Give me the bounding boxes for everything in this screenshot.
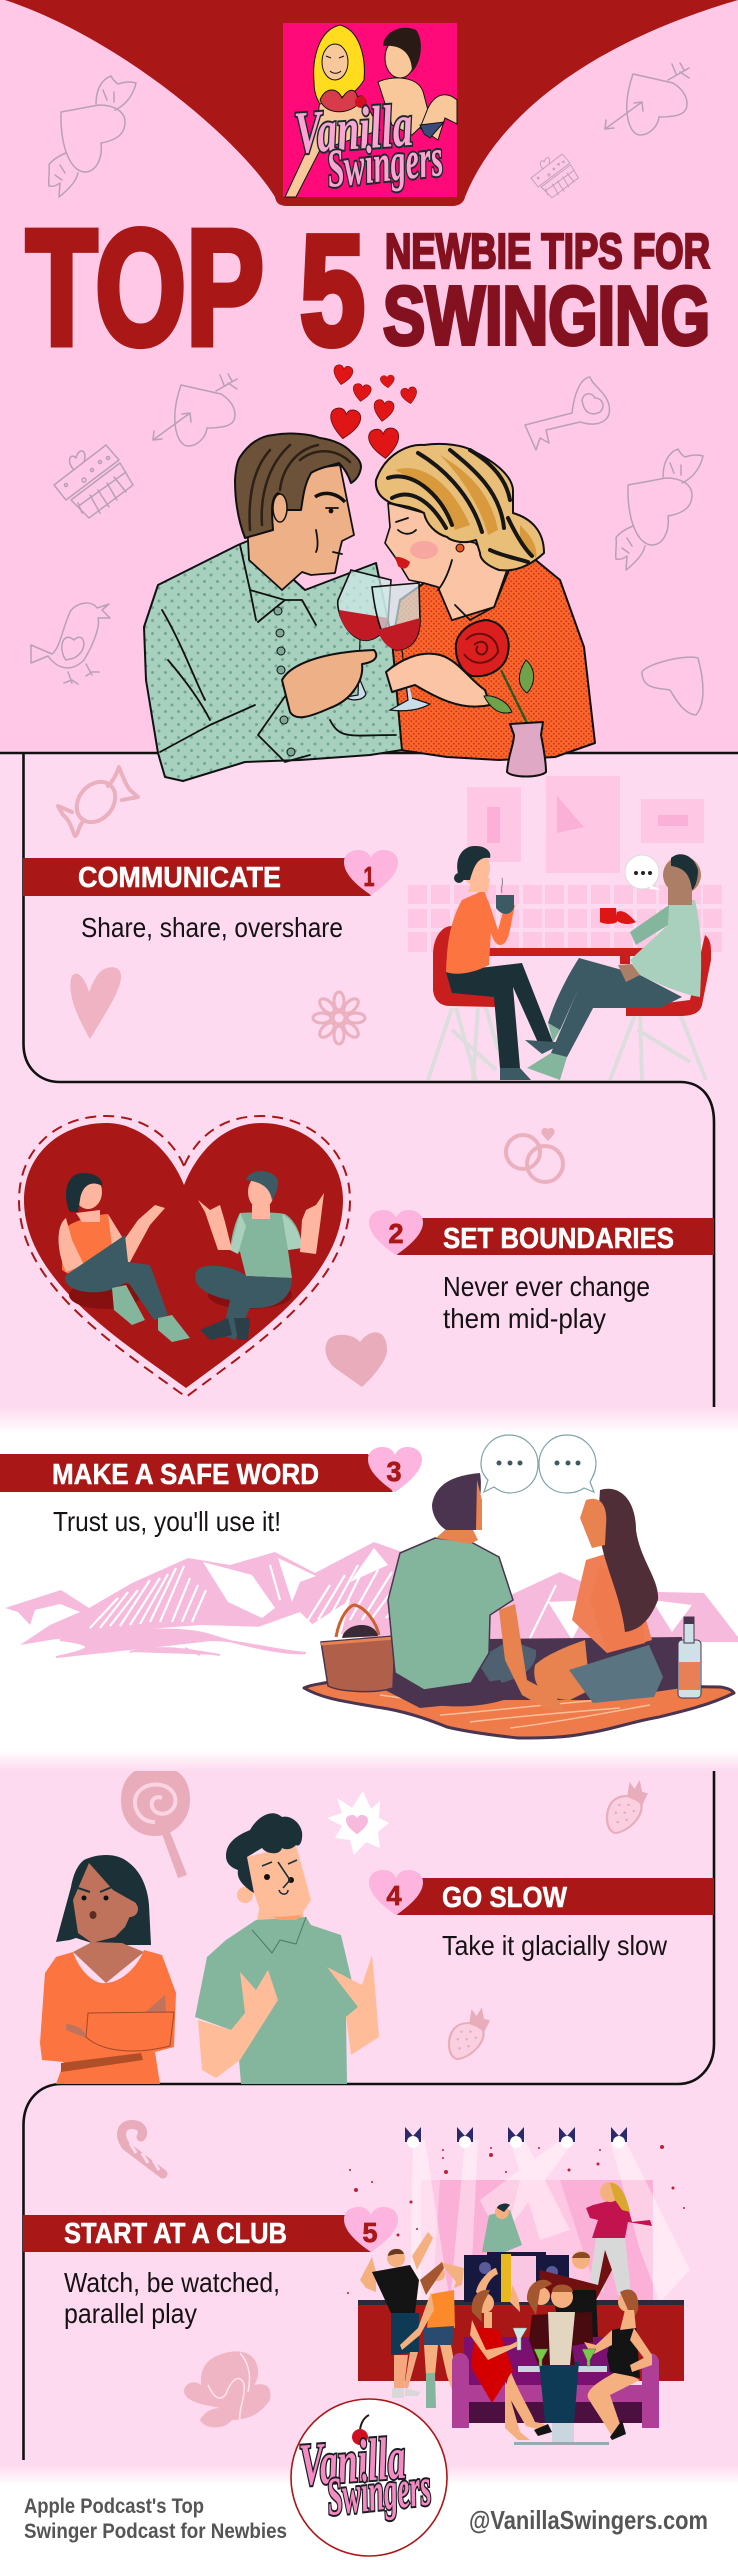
background rose [184, 2351, 270, 2428]
logo wordmark [292, 92, 446, 199]
woman dress [391, 557, 595, 760]
center man [529, 2284, 593, 2436]
background heart [70, 967, 121, 1039]
logo woman figure [285, 25, 380, 197]
footer [24, 2399, 708, 2556]
starburst with heart [327, 1791, 389, 1855]
number heart 1 [344, 850, 398, 895]
footer wordmark: Swingers [324, 2456, 434, 2527]
footer tagline: Apple Podcast's Top [24, 2495, 204, 2518]
top logo [283, 23, 457, 199]
number heart 2: 2 [388, 1218, 404, 1249]
man from behind [388, 1473, 565, 1712]
doodle: arrow heart left [153, 374, 237, 446]
man hair strands [250, 445, 350, 530]
background doodle: flower [313, 992, 365, 1044]
heading 5: START AT A CLUB [64, 2218, 287, 2250]
number heart 4 [369, 1870, 423, 1915]
doodle: outline heart [642, 657, 703, 715]
man hair [235, 434, 361, 538]
woman crossed arms [40, 1855, 176, 2084]
woman face details [395, 518, 494, 620]
body text 5: Watch, be watched, [64, 2267, 280, 2298]
background doodle: candy [58, 767, 138, 836]
doodle: gift large [54, 445, 133, 518]
picnic blanket [304, 1682, 734, 1738]
wine glass right [372, 583, 430, 711]
red heart [24, 1123, 343, 1388]
ground shadow [381, 1637, 682, 1708]
doodle: winged heart right [616, 449, 703, 570]
hearts above the couple [328, 364, 419, 460]
woman hand and arm [386, 654, 490, 707]
speech bubbles [481, 1435, 596, 1493]
number heart 5: 5 [362, 2217, 378, 2248]
background doodle: strawberry top [607, 1783, 646, 1833]
body text 4: Take it glacially slow [442, 1930, 668, 1961]
background doodle: strawberry bottom [449, 2010, 488, 2059]
section frame line: panel 4 and 5 [24, 1771, 714, 2460]
cherry [352, 2415, 369, 2445]
dancing girl [400, 2262, 464, 2408]
confetti [347, 2145, 685, 2294]
background doodle: lollipop [121, 1771, 190, 1878]
man skin [247, 465, 354, 590]
title: TOP [26, 196, 264, 379]
man hand [282, 650, 376, 717]
footer logo badge [291, 2399, 447, 2556]
number heart 3 [368, 1447, 422, 1492]
shirt lines and buttons [160, 545, 396, 762]
panel 4: go slow [40, 1771, 714, 2084]
man shirt [144, 540, 402, 781]
picnic basket [321, 1605, 395, 1692]
sofa [452, 2337, 659, 2428]
mountains [5, 1542, 738, 1657]
number heart 2 [369, 1210, 423, 1255]
vase [507, 722, 546, 776]
singer [586, 2182, 652, 2295]
man face details [273, 493, 345, 554]
footer wordmark [297, 2425, 434, 2527]
doodle: bird [31, 603, 110, 684]
right woman [584, 2289, 652, 2440]
man sitting [195, 1171, 324, 1340]
background heart [325, 1332, 387, 1387]
dashed heart outline [19, 1116, 350, 1397]
body text 2 [443, 1271, 650, 1334]
number heart 4: 4 [386, 1880, 402, 1911]
ribbon 4 [397, 1878, 714, 1915]
logo man figure [378, 28, 457, 140]
title [26, 196, 710, 379]
woman hair strands [388, 450, 536, 562]
logo wordmark: Vanilla [292, 92, 415, 166]
doodle: arrow heart right [605, 63, 689, 135]
body text 3: Trust us, you'll use it! [53, 1506, 281, 1537]
ribbon 5 [23, 2215, 371, 2252]
woman skin [385, 503, 508, 620]
body text 5: parallel play [64, 2298, 197, 2329]
woman from behind [534, 1489, 663, 1703]
doodle: key [525, 377, 609, 450]
background doodle: rings [506, 1130, 563, 1182]
doodle: gift small [531, 154, 578, 198]
stage lights [405, 2127, 627, 2148]
cafe wall backdrop [408, 776, 722, 952]
panel 5: start at a club [23, 2124, 690, 2445]
background doodle: candy cane [121, 2124, 163, 2174]
wine glass left [338, 570, 391, 700]
heading 4: GO SLOW [442, 1882, 568, 1914]
cafe table [489, 948, 649, 964]
heading 2: SET BOUNDARIES [443, 1223, 674, 1255]
rose [456, 620, 534, 723]
wine bottle [678, 1617, 701, 1698]
club stage backdrop [410, 2140, 690, 2302]
DJ and speakers [464, 2204, 569, 2302]
logo wordmark: Swingers [324, 127, 446, 199]
couple toasting illustration [144, 434, 595, 781]
body text 1: Share, share, overshare [81, 912, 343, 943]
footer tagline [24, 2495, 287, 2543]
doodles: hero background icons [31, 63, 703, 715]
woman sitting [58, 1173, 190, 1342]
heading 1: COMMUNICATE [78, 862, 281, 894]
man thinking [195, 1813, 379, 2084]
doodle: winged heart left [49, 76, 136, 197]
number heart 5 [344, 2207, 398, 2252]
section frame line: panel 1 and 2 [0, 753, 738, 1407]
dancing man [360, 2232, 433, 2398]
chairs [428, 926, 711, 1080]
cocktail glasses [513, 2328, 596, 2366]
panel 1: communicate [23, 767, 722, 1080]
ribbon 1 [23, 858, 371, 896]
back dancers [476, 2250, 612, 2340]
seated woman [446, 846, 570, 1080]
number heart 1: 1 [364, 861, 374, 892]
woman hair [376, 444, 544, 570]
table [514, 2366, 609, 2445]
number heart 3: 3 [386, 1456, 402, 1487]
panel 3: make a safe word [0, 1435, 738, 1738]
ribbon 2 [397, 1218, 714, 1255]
heading 3: MAKE A SAFE WORD [52, 1459, 319, 1491]
blanket texture [380, 1695, 650, 1728]
body text 2: them mid-play [443, 1303, 606, 1334]
body text 5 [64, 2267, 280, 2329]
club wall [358, 2300, 684, 2381]
body text 2: Never ever change [443, 1271, 650, 1302]
woman in red dress [470, 2290, 545, 2440]
footer tagline: Swinger Podcast for Newbies [24, 2520, 287, 2543]
ribbon 3 [0, 1454, 393, 1492]
footer wordmark: Vanilla [297, 2425, 408, 2498]
title: 5 [300, 204, 365, 378]
panel 2: set boundaries [19, 1116, 714, 1397]
seated man [527, 854, 701, 1080]
header band [5, 0, 738, 206]
